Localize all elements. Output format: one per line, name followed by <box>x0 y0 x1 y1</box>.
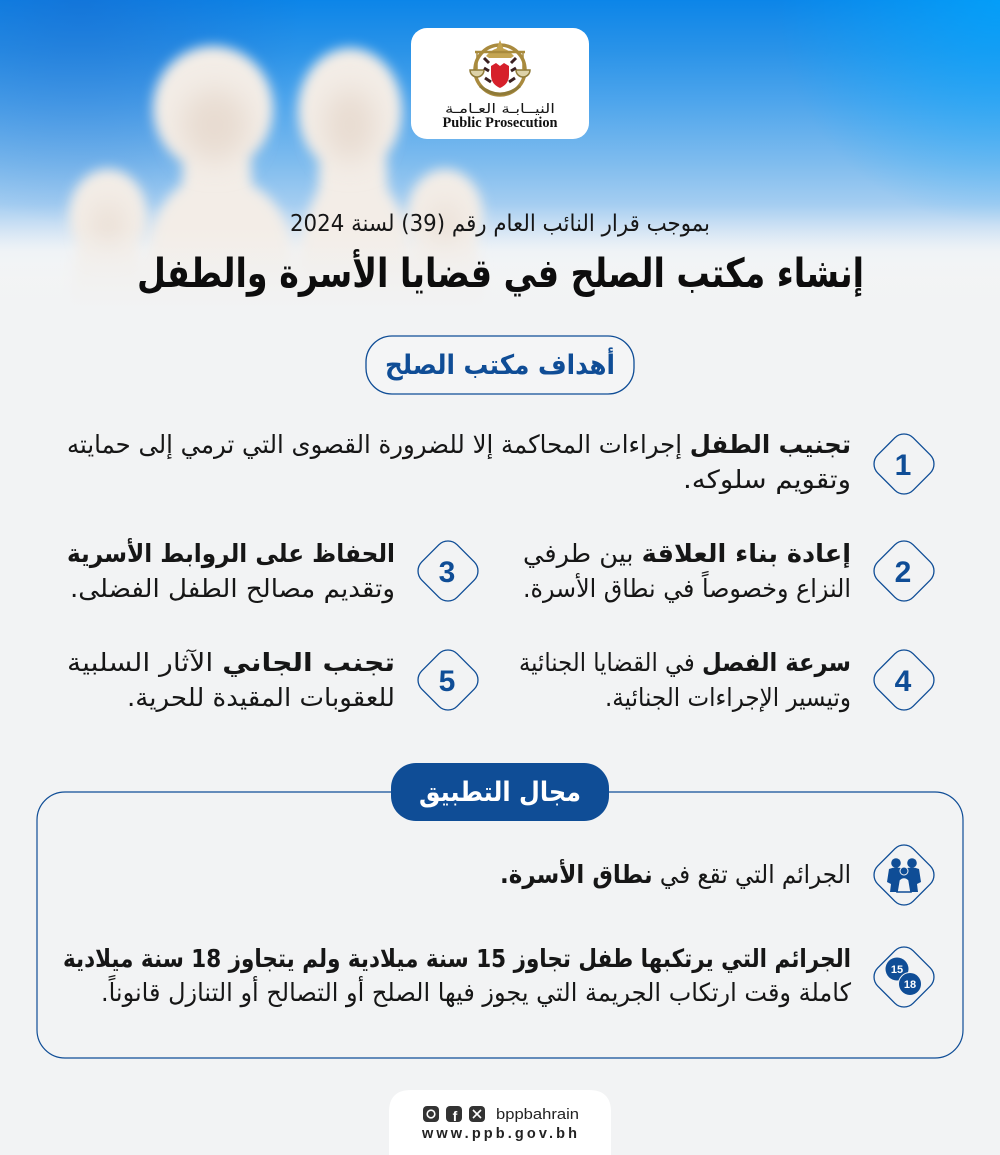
badge 5: 5 <box>439 665 455 698</box>
objective 3 text <box>67 538 395 604</box>
objective 4 <box>519 645 939 715</box>
logo english name: Public Prosecution <box>442 115 558 131</box>
panel: scope of application <box>37 763 963 1058</box>
badge 2 <box>869 536 939 606</box>
badge 2: 2 <box>895 556 911 589</box>
objective 1 text <box>67 430 851 495</box>
website: www.ppb.gov.bh <box>421 1126 577 1142</box>
icon: family <box>869 840 939 910</box>
background: fade into page colour <box>0 228 1000 310</box>
icon: facebook: f <box>453 1108 458 1124</box>
objective 1 text: تجنيب الطفل إجراءات المحاكمة إلا للضرورة القصوى التي ترمي إلى حمايته <box>67 430 851 460</box>
objective 4 text: سرعة الفصل في القضايا الجنائية <box>519 648 851 678</box>
badge 5 <box>413 645 483 715</box>
badge 3 <box>413 536 483 606</box>
icon: ages 15 and 18: 18 <box>904 979 916 991</box>
objective 4 text <box>519 648 851 713</box>
section heading: objectives <box>366 336 634 394</box>
icon: x <box>469 1106 485 1122</box>
objective 5 text <box>67 648 395 712</box>
logo card <box>411 28 589 139</box>
scope heading pill: مجال التطبيق <box>419 777 581 808</box>
footer card <box>389 1090 611 1155</box>
badge 3: 3 <box>439 556 455 589</box>
scope item 2 text: كاملة وقت ارتكاب الجريمة التي يجوز فيها الصلح أو التصالح أو التنازل قانوناً. <box>101 975 851 1008</box>
icon: ages 15 and 18 <box>869 942 939 1012</box>
objective 3 <box>67 536 483 606</box>
logo arabic name: النيــابـة العـامـة <box>445 102 555 117</box>
objective 2 text: النزاع وخصوصاً في نطاق الأسرة. <box>523 571 851 604</box>
icon: ages 15 and 18: 15 <box>891 964 903 976</box>
scope item 1 text: الجرائم التي تقع في نطاق الأسرة. <box>500 859 851 890</box>
objective 5 <box>67 645 483 715</box>
badge 4 <box>869 645 939 715</box>
section heading: objectives: أهداف مكتب الصلح <box>385 347 615 381</box>
objective 2 <box>523 536 939 606</box>
objective 5 text: للعقوبات المقيدة للحرية. <box>127 683 395 712</box>
background: blurred family figures <box>68 46 486 320</box>
scope item 2 text <box>63 944 851 1008</box>
objective 4 text: وتيسير الإجراءات الجنائية. <box>605 683 851 713</box>
background: blue sky gradient <box>0 0 1000 340</box>
objective 2 text: إعادة بناء العلاقة بين طرفي <box>523 539 851 568</box>
objective 2 text <box>523 539 851 604</box>
title: إنشاء مكتب الصلح في قضايا الأسرة والطفل <box>137 248 864 297</box>
scope heading pill <box>391 763 609 821</box>
subtitle: بموجب قرار النائب العام رقم (39) لسنة 2024 <box>290 211 710 237</box>
badge 4: 4 <box>895 665 912 698</box>
icon: instagram <box>423 1106 439 1122</box>
social handle: bppbahrain <box>496 1107 579 1123</box>
badge 1 <box>869 429 939 499</box>
objective 1 text: وتقويم سلوكه. <box>683 465 851 495</box>
icon: facebook <box>446 1106 462 1124</box>
objective 3 text: الحفاظ على الروابط الأسرية <box>67 538 395 569</box>
badge 1: 1 <box>895 449 911 482</box>
scope item 2 text: الجرائم التي يرتكبها طفل تجاوز 15 سنة ميلادية ولم يتجاوز 18 سنة ميلادية <box>63 944 851 974</box>
logo emblem <box>470 40 530 95</box>
objective 3 text: وتقديم مصالح الطفل الفضلى. <box>70 574 395 604</box>
objective 5 text: تجنب الجاني الآثار السلبية <box>67 648 395 677</box>
objective 1 <box>67 429 939 499</box>
